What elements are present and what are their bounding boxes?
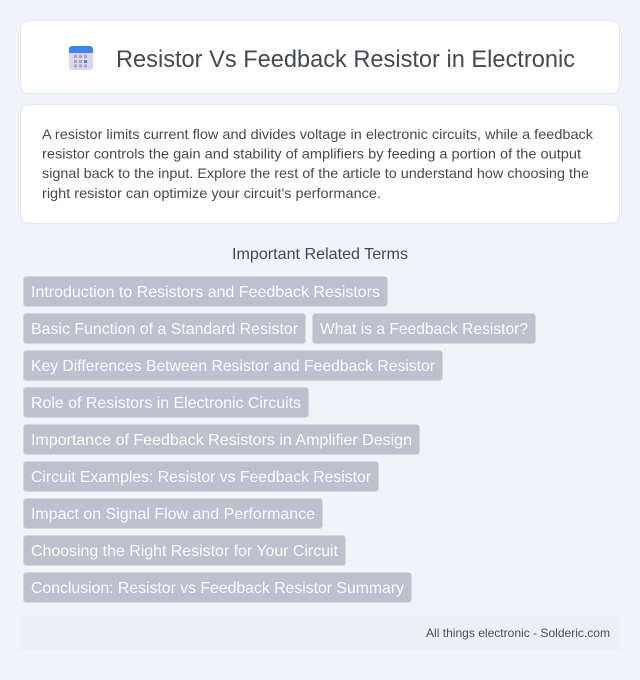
- tag: role of resistors: Role of Resistors in Electronic Circuits: [31, 395, 301, 412]
- tag: what is a feedback resistor: [312, 314, 536, 344]
- tag: basic function: [24, 314, 306, 344]
- tag: conclusion: Conclusion: Resistor vs Feedback Resistor Summary: [31, 580, 404, 597]
- tag: choosing: [24, 536, 346, 566]
- tag: introduction: Introduction to Resistors and Feedback Resistors: [31, 284, 380, 301]
- tag: importance: Importance of Feedback Resistors in Amplifier Design: [31, 432, 412, 449]
- tag: role of resistors: [24, 388, 308, 418]
- heading: related terms: Important Related Terms: [232, 246, 408, 263]
- footer: [20, 616, 620, 650]
- tag: introduction: [24, 276, 388, 306]
- text block: summary: [42, 126, 594, 201]
- tag: what is a feedback resistor: What is a Feedback Resistor?: [320, 321, 528, 338]
- icon: calendar grid: [69, 46, 93, 70]
- tag: importance: [24, 424, 420, 454]
- text block: summary: right resistor can optimize your circuit's performance.: [42, 185, 381, 201]
- tag: key differences: [24, 350, 442, 380]
- tag: choosing: Choosing the Right Resistor for Your Circuit: [31, 543, 339, 560]
- tag: circuit examples: Circuit Examples: Resistor vs Feedback Resistor: [31, 469, 372, 486]
- text block: summary: resistor controls the gain and stability of amplifiers by feeding a portion of the output: [42, 146, 581, 162]
- tag: impact: [24, 498, 322, 528]
- text block: summary: A resistor limits current flow and divides voltage in electronic circuits, while a feedback: [42, 126, 594, 142]
- tag: conclusion: [24, 572, 412, 602]
- title: Resistor Vs Feedback Resistor in Electronic: [116, 46, 575, 73]
- text block: summary: signal back to the input. Explore the rest of the article to understand how choosing the: [42, 165, 589, 181]
- tag list: related terms: [24, 276, 536, 602]
- tag: circuit examples: [24, 462, 378, 492]
- footer credit: All things electronic - Solderic.com: [426, 626, 610, 640]
- tag: key differences: Key Differences Between Resistor and Feedback Resistor: [31, 358, 436, 375]
- tag: impact: Impact on Signal Flow and Performance: [31, 506, 315, 523]
- tag: basic function: Basic Function of a Standard Resistor: [31, 321, 299, 338]
- panel: summary paragraph: [20, 104, 620, 224]
- panel: title header: [20, 20, 620, 94]
